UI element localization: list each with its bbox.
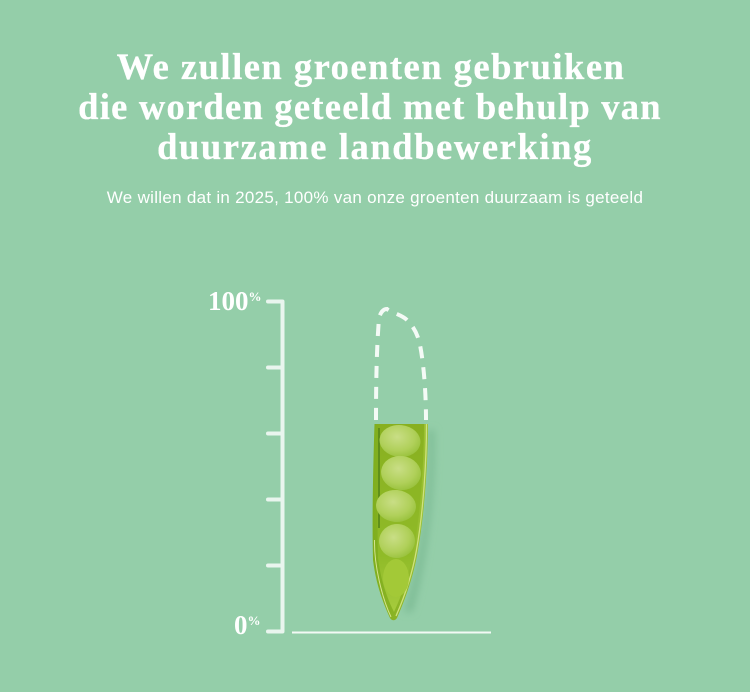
dashed pod outline: target: [376, 309, 426, 420]
label: 0%: 0: [234, 610, 248, 640]
title: We zullen groenten gebruiken: [117, 46, 625, 87]
pod left edge highlight: [374, 540, 391, 617]
label: 100%: 100: [208, 286, 248, 316]
title: die worden geteeld met behulp van: [78, 86, 662, 127]
pod dark groove: [378, 428, 380, 528]
pod shadow: [404, 430, 434, 612]
title: [78, 46, 662, 168]
label: 0%: %: [248, 613, 260, 628]
pod lower highlight: [383, 559, 409, 597]
title: duurzame landbewerking: [157, 126, 593, 167]
pod right edge highlight: [396, 424, 426, 616]
peas: [378, 423, 422, 459]
label: 100%: %: [248, 289, 262, 304]
pod shell: [373, 424, 428, 620]
subtitle: We willen dat in 2025, 100% van onze groenten duurzaam is geteeld: [107, 188, 643, 207]
pod inner: [378, 424, 424, 612]
pea pod: current level: [373, 423, 434, 620]
baseline: [292, 632, 491, 634]
vertical axis with ticks: [268, 302, 282, 632]
